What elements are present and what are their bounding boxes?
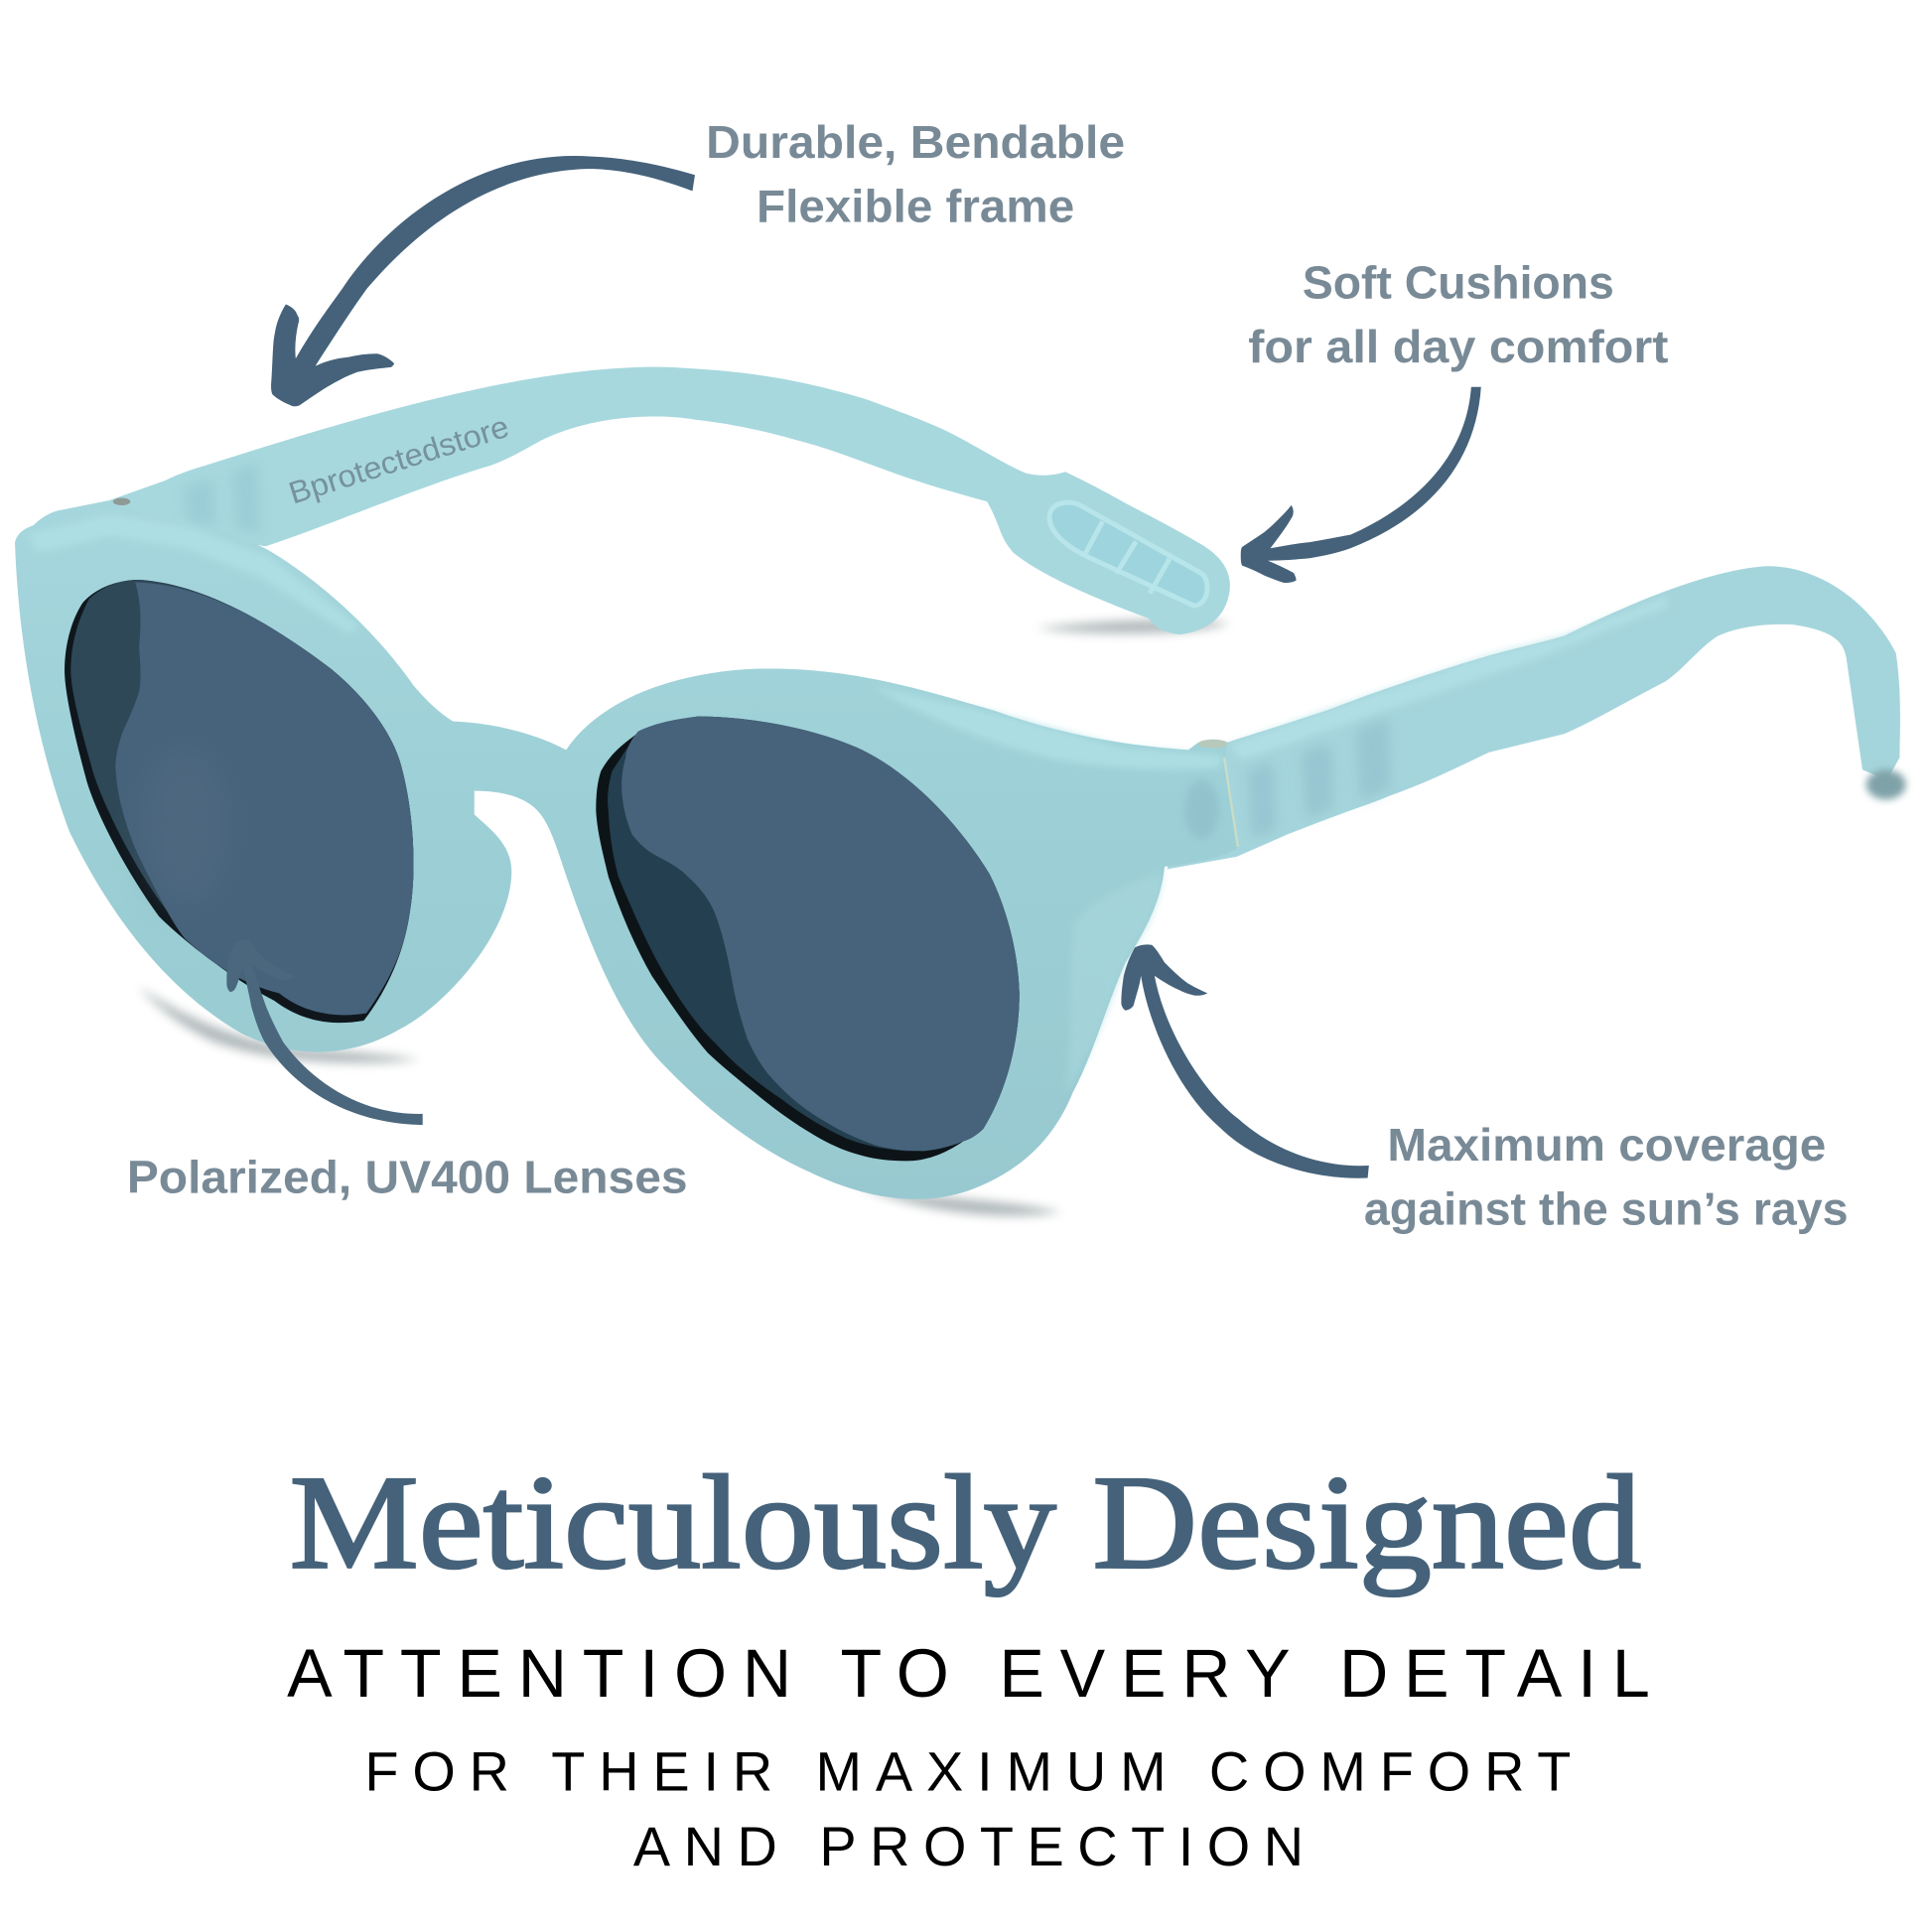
supporting text: [364, 1739, 1571, 1877]
side shield highlight: [1065, 872, 1163, 1093]
left lens tint: [115, 583, 414, 1015]
callout: maximum coverage: [1364, 1119, 1849, 1235]
temple arm top highlight: [1229, 596, 1669, 759]
callout: soft cushions: for all day comfort: [1248, 321, 1668, 372]
arrow: soft cushions: [1241, 387, 1481, 583]
far temple arm: [109, 367, 1230, 634]
callout: durable frame: Flexible frame: [757, 180, 1074, 231]
callout: durable frame: [706, 116, 1125, 231]
illustration: sunglasses: [15, 367, 1906, 1215]
right lens shade: [608, 732, 994, 1151]
callout: maximum coverage: Maximum coverage: [1387, 1119, 1826, 1171]
callout: soft cushions: [1248, 256, 1668, 372]
right lens tint: [621, 717, 1020, 1151]
left lens: [65, 580, 414, 1023]
right lens rim: [596, 717, 1020, 1161]
near temple arm: [1168, 566, 1900, 869]
near arm ridges: [1248, 718, 1391, 839]
left lens rim: [65, 580, 414, 1023]
far arm ridges: [184, 462, 261, 534]
frame top bevel highlights: [28, 514, 1222, 769]
supporting text: AND PROTECTION: [633, 1815, 1304, 1877]
right lens: [596, 717, 1020, 1161]
arrow: maximum coverage: [1121, 944, 1369, 1178]
brand imprint: Bprotectedstore: [285, 409, 513, 510]
callout: polarized lenses: Polarized, UV400 Lenses: [127, 1151, 688, 1202]
arrow: durable frame: [271, 156, 695, 406]
supporting text: FOR THEIR MAXIMUM COMFORT: [364, 1739, 1571, 1802]
title: Meticulously Designed: [290, 1449, 1641, 1597]
soft cushion detail: [1049, 502, 1207, 606]
temple tip blur: [1866, 769, 1906, 799]
arrow: polarized lenses: [226, 940, 423, 1125]
front frame: [15, 500, 1239, 1199]
left lens shade: [70, 580, 414, 1015]
ground shadows: [139, 620, 1229, 1215]
subtitle: ATTENTION TO EVERY DETAIL: [287, 1636, 1650, 1712]
left lens soft reflection: [143, 745, 229, 906]
callout: durable frame: Durable, Bendable: [706, 116, 1125, 168]
hinge screws: [113, 498, 1238, 847]
callout: soft cushions: Soft Cushions: [1303, 256, 1614, 308]
frame end shading: [1184, 779, 1219, 839]
callout: maximum coverage: against the sun’s rays: [1364, 1183, 1849, 1235]
